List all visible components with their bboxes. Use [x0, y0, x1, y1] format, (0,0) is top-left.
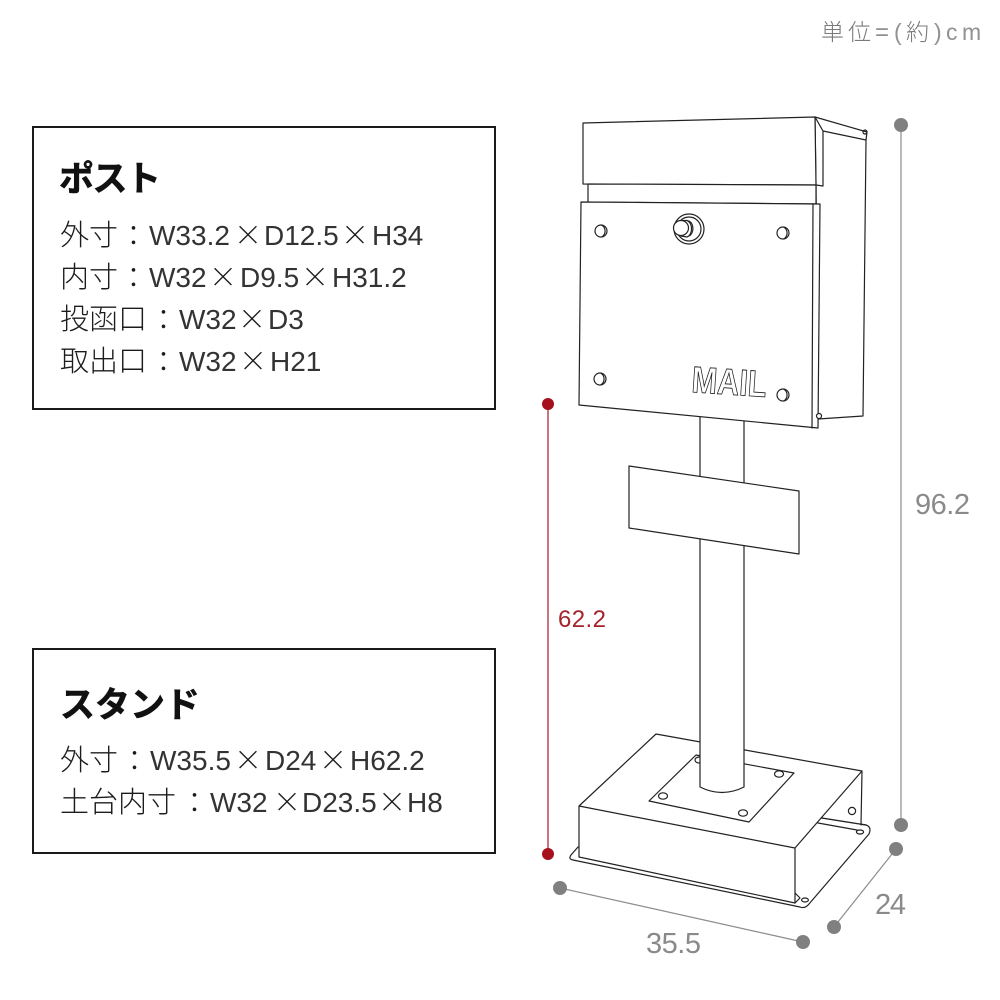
- mailbox front panel: [579, 202, 820, 428]
- heading: stand: スタンド: [60, 686, 200, 725]
- text: post outlet size: 取出口: [60, 338, 147, 380]
- text: post inner size: W32: [149, 262, 207, 293]
- text: base inner size: ：: [180, 780, 209, 822]
- unit note: 位: [848, 19, 871, 45]
- text: post slot size: ：: [149, 297, 178, 339]
- mailbox roof: [583, 117, 816, 185]
- text: post slot size: 投函口: [60, 296, 147, 338]
- base box: [579, 734, 862, 903]
- heading: post: ポスト: [59, 160, 161, 199]
- text: post slot size: ×: [238, 298, 266, 338]
- text: post inner size: D9.5: [240, 262, 299, 293]
- text: post slot size: D3: [268, 304, 304, 335]
- unit note: c: [946, 19, 958, 45]
- illustration: pole: [700, 415, 744, 792]
- value: 24: 24: [875, 889, 906, 921]
- text: stand outer size: H62.2: [350, 745, 425, 776]
- text: post inner size: H31.2: [332, 262, 407, 293]
- unit note: m: [962, 19, 981, 45]
- text: post outer size: ×: [341, 214, 369, 254]
- illustration: mailbox: [579, 117, 867, 428]
- text: post outlet size: ：: [149, 339, 178, 381]
- illustration: stand base: [570, 734, 870, 908]
- dimension: width: [553, 881, 810, 960]
- text: post outlet size: ×: [239, 340, 267, 380]
- text: post outer size: ：: [119, 213, 148, 255]
- text: post inner size: 内寸: [60, 254, 118, 296]
- text: post inner size: ：: [119, 255, 148, 297]
- lock knob: [674, 214, 704, 244]
- text: post inner size: ×: [301, 256, 329, 296]
- value: 96.2: 96.2: [915, 489, 970, 521]
- text: stand outer size: W35.5: [150, 745, 231, 776]
- text: stand outer size: D24: [265, 745, 316, 776]
- dimension: total height: [894, 118, 970, 832]
- text: post outer size: D12.5: [264, 220, 339, 251]
- illustration: name plate: [629, 466, 799, 554]
- text: post outlet size: W32: [179, 346, 237, 377]
- text: base inner size: ×: [378, 781, 406, 821]
- text: post outer size: ×: [234, 214, 262, 254]
- dimension: stand height: [542, 398, 606, 860]
- text: base inner size: W32: [210, 787, 268, 818]
- panel: stand: [33, 649, 495, 853]
- text: post outlet size: H21: [270, 346, 321, 377]
- text: post outer size: W33.2: [149, 220, 230, 251]
- text: base inner size: ×: [273, 781, 301, 821]
- value: 62.2: 62.2: [558, 606, 606, 633]
- dimension: depth: [827, 842, 906, 934]
- unit note: =: [875, 19, 889, 46]
- screws: [594, 225, 789, 401]
- text: base inner size: D23.5: [302, 787, 377, 818]
- text: post outer size: H34: [372, 220, 423, 251]
- panel: post: [33, 127, 495, 409]
- text: base inner size: 土台内寸: [60, 779, 176, 821]
- mounting plate: [649, 755, 794, 822]
- mailbox side: [815, 117, 867, 419]
- text: stand outer size: 外寸: [60, 737, 118, 779]
- text: post outer size: 外寸: [60, 212, 118, 254]
- text: post slot size: W32: [179, 304, 237, 335]
- base flange: [570, 818, 870, 908]
- text: post inner size: ×: [209, 256, 237, 296]
- mailbox neck: [588, 184, 816, 204]
- text: stand outer size: ×: [234, 739, 262, 779]
- unit note: (: [894, 19, 902, 45]
- unit note: 単: [821, 19, 844, 45]
- unit note: ): [934, 19, 942, 45]
- unit note: 約: [906, 19, 929, 45]
- MAIL lettering: MAIL: [690, 359, 768, 405]
- text: stand outer size: ：: [120, 738, 149, 780]
- text: base inner size: H8: [407, 787, 443, 818]
- text: stand outer size: ×: [319, 739, 347, 779]
- value: 35.5: 35.5: [646, 928, 701, 960]
